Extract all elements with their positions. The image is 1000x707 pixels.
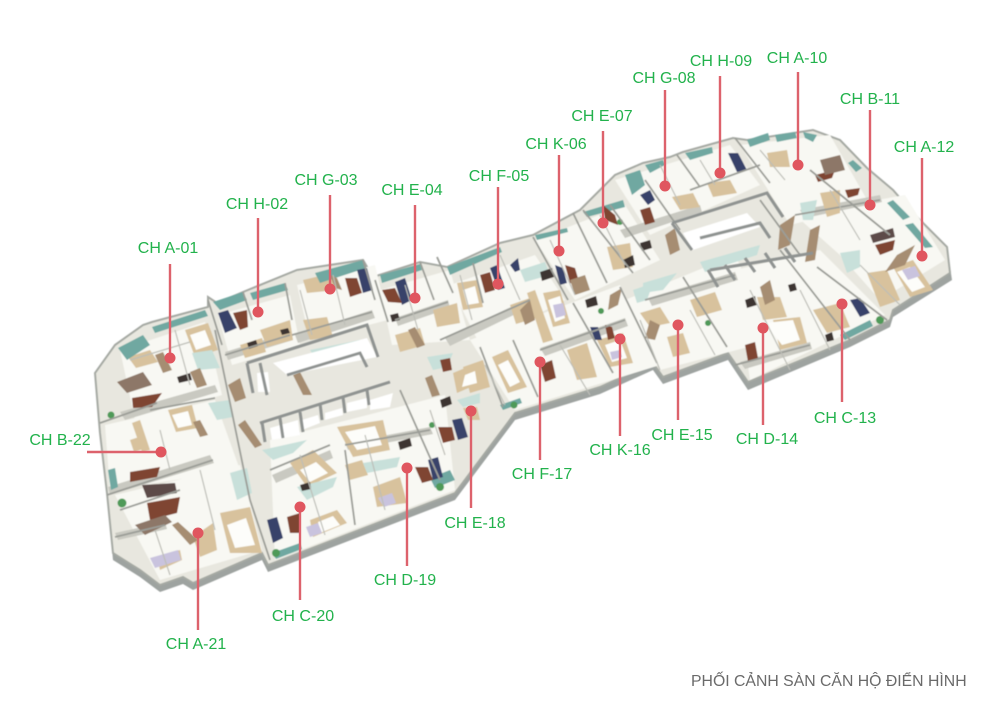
label: CH G-08: CH G-08 bbox=[632, 70, 696, 87]
balconies bbox=[108, 132, 933, 559]
label: CH H-09: CH H-09 bbox=[690, 53, 752, 70]
left atrium void bbox=[273, 338, 377, 375]
left core voids bbox=[257, 372, 393, 440]
label: CH B-22: CH B-22 bbox=[29, 432, 91, 449]
outer wall thickness bbox=[95, 130, 952, 592]
right atrium void bbox=[683, 213, 760, 250]
label: CH K-16: CH K-16 bbox=[589, 442, 651, 459]
interior walls bbox=[100, 138, 890, 560]
white beds bbox=[172, 267, 925, 548]
red brown rugs bbox=[130, 170, 895, 533]
left core bbox=[247, 193, 813, 442]
lavender beds bbox=[150, 266, 920, 568]
label: CH A-01 bbox=[138, 240, 198, 364]
label: CH E-15: CH E-15 bbox=[651, 427, 713, 444]
label: CH C-13: CH C-13 bbox=[814, 410, 876, 427]
caption: PHỐI CẢNH SÀN CĂN HỘ ĐIỂN HÌNH bbox=[691, 670, 967, 690]
left core walls bbox=[247, 325, 390, 442]
floor plan building bbox=[95, 130, 952, 592]
label: CH E-18: CH E-18 bbox=[444, 515, 506, 532]
label: CH A-10: CH A-10 bbox=[767, 50, 827, 67]
grey-brown sofas bbox=[142, 228, 895, 498]
label: CH K-06 bbox=[525, 136, 587, 256]
label: CH A-01: CH A-01 bbox=[138, 240, 198, 257]
wood floors bbox=[128, 150, 933, 570]
label: CH F-05 bbox=[469, 168, 529, 290]
label: CH E-04: CH E-04 bbox=[381, 182, 443, 199]
label: CH A-10 bbox=[767, 50, 827, 170]
label: CH G-08 bbox=[632, 70, 696, 192]
label: CH B-11: CH B-11 bbox=[840, 91, 900, 108]
label: CH A-12: CH A-12 bbox=[894, 139, 954, 156]
label: CH G-03: CH G-03 bbox=[294, 172, 358, 189]
label: CH H-02: CH H-02 bbox=[226, 196, 288, 213]
floor plate bbox=[95, 130, 950, 585]
label: CH K-16 bbox=[589, 334, 651, 459]
dining sets bbox=[177, 240, 834, 491]
label: CH E-07: CH E-07 bbox=[571, 108, 633, 125]
label: CH F-17: CH F-17 bbox=[512, 466, 572, 483]
label: CH E-15 bbox=[651, 320, 713, 444]
label: CH A-21: CH A-21 bbox=[166, 636, 226, 653]
fine partitions bbox=[130, 150, 900, 575]
label: CH E-07 bbox=[571, 108, 633, 228]
glass bathrooms bbox=[192, 200, 860, 500]
label: CH E-18 bbox=[444, 406, 506, 532]
label: CH F-05: CH F-05 bbox=[469, 168, 529, 185]
label: CH H-02 bbox=[226, 196, 288, 318]
right core walls bbox=[672, 193, 813, 287]
label: CH B-11 bbox=[840, 91, 900, 210]
label: CH E-04 bbox=[381, 182, 443, 304]
label: CH B-22 bbox=[29, 432, 166, 458]
label: CH D-14 bbox=[736, 322, 798, 448]
label: CH K-06: CH K-06 bbox=[525, 136, 587, 153]
label: CH A-12 bbox=[894, 139, 954, 262]
plants bbox=[108, 219, 884, 557]
shaded wall sides bbox=[108, 195, 882, 540]
dark sofas bbox=[218, 153, 870, 543]
label: CH C-20: CH C-20 bbox=[272, 608, 334, 625]
brown doors and panels bbox=[155, 215, 915, 545]
label: CH C-20 bbox=[272, 502, 334, 625]
label: CH D-14: CH D-14 bbox=[736, 431, 798, 448]
label: CH F-17 bbox=[512, 356, 572, 483]
label: CH A-21 bbox=[166, 528, 226, 653]
white room blocks bbox=[105, 135, 945, 580]
label: CH H-09 bbox=[690, 53, 752, 178]
label: CH C-13 bbox=[814, 298, 876, 427]
label: CH G-03 bbox=[294, 172, 358, 294]
label: CH D-19 bbox=[374, 462, 436, 589]
stripped grey area rugs bbox=[117, 155, 845, 535]
label: CH D-19: CH D-19 bbox=[374, 572, 436, 589]
